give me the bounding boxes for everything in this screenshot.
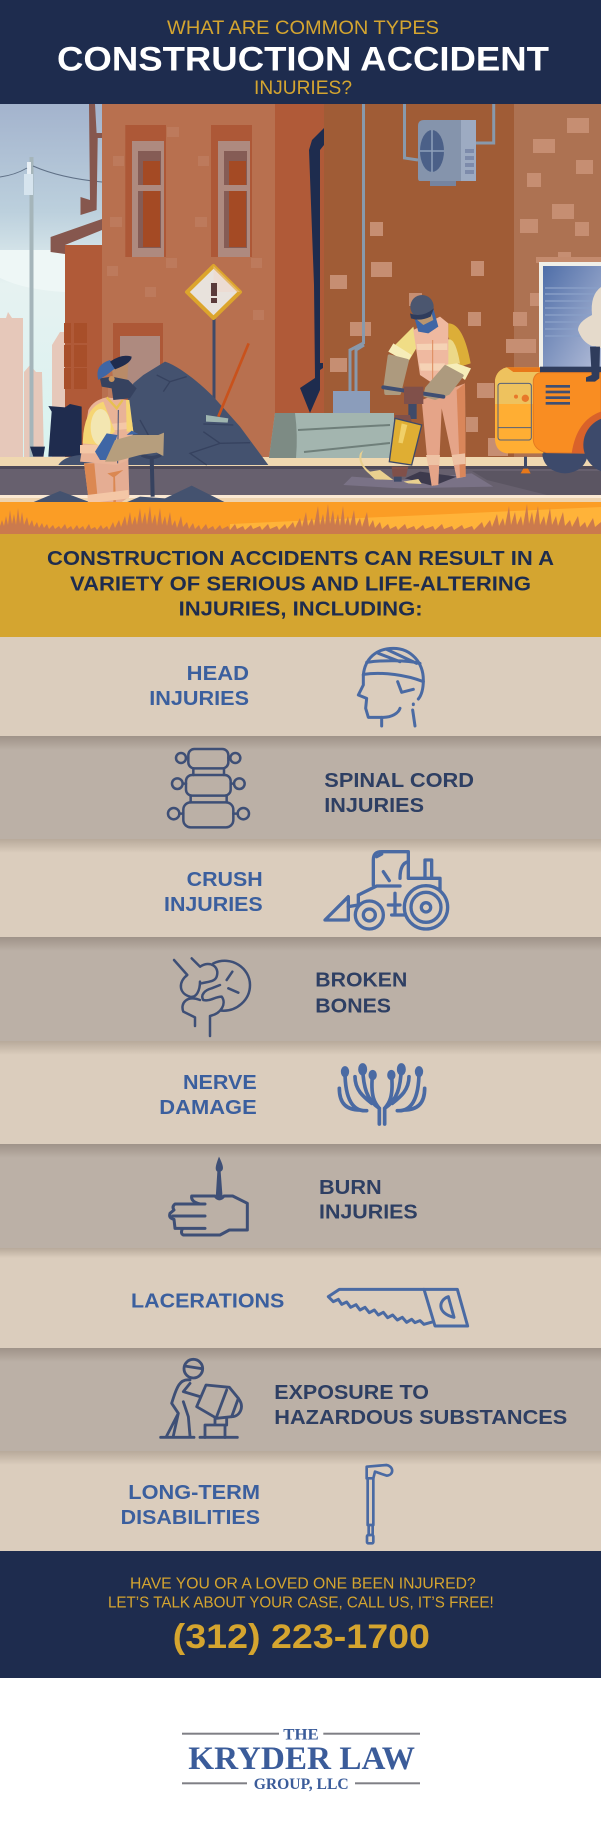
icon: vertebrae [168,749,249,827]
head [112,363,128,382]
shovel handle [152,457,153,497]
label: INJURIES [149,688,249,710]
icon: bandaged head [358,648,423,726]
label [149,663,249,710]
call to action text: LET’S TALK ABOUT YOUR CASE, CALL US, IT’S FREE! [108,1594,494,1611]
truck body [495,367,543,453]
icon: hand saw [328,1289,468,1326]
label: INJURIES [319,1202,418,1224]
head [415,308,438,333]
header banner [0,0,601,104]
label [319,1177,418,1224]
right worker, jackhammer and truck [343,295,601,488]
icon: broken bone [174,958,250,1036]
label: BURN [319,1177,382,1199]
label: INJURIES [324,795,424,817]
right brick building [324,104,601,458]
left brick building [51,104,324,458]
label: HEAD [187,663,249,685]
header subline: INJURIES? [254,77,352,99]
label [159,1072,257,1119]
rubble [359,450,422,484]
phone number: (312) 223-1700 [173,1618,430,1656]
icon: worker with cement mixer [161,1359,241,1437]
intro band [0,534,601,637]
sidewalk and road [0,457,601,502]
logo: The Kryder Law Group: KRYDER LAW [188,1741,415,1777]
label [274,1382,567,1429]
icon: burned hand [170,1157,247,1235]
call to action text: HAVE YOU OR A LOVED ONE BEEN INJURED? [130,1575,476,1592]
left worker and asphalt pile [25,343,268,506]
sky and skyline [0,104,110,464]
air conditioner [404,104,494,186]
label: LONG-TERM [128,1482,260,1504]
upper windows [125,125,252,257]
label: HAZARDOUS SUBSTANCES [274,1407,567,1429]
label: NERVE [183,1072,257,1094]
label: EXPOSURE TO [274,1382,429,1404]
main title: CONSTRUCTION ACCIDENT [57,40,549,78]
label [324,770,474,817]
broom [218,343,249,417]
row: head injuries [0,637,601,736]
arm [95,431,138,460]
label [315,970,407,1018]
utility pole [0,157,102,458]
trash bin [30,404,82,457]
label: BONES [315,996,391,1018]
label: BROKEN [315,970,407,992]
row: lacerations [0,1248,601,1348]
row: broken bones [0,937,601,1041]
legs [422,383,466,486]
road slab and hole [343,473,493,488]
pants [84,460,129,506]
lower window and door [64,323,163,458]
label [121,1482,260,1529]
truck wheel under body [542,433,588,473]
vest [80,397,133,465]
warning sign [187,266,240,444]
logo: The Kryder Law Group [182,1726,420,1793]
small asphalt piles [25,486,232,506]
icon: walking cane [367,1465,392,1543]
row: burn injuries [0,1144,601,1248]
label [164,869,263,916]
illustration: construction street scene [0,104,601,534]
icon: bulldozer [325,852,448,929]
row: spinal cord injuries [0,736,601,839]
row: long-term disabilities [0,1451,601,1551]
row: exposure to hazardous substances [0,1348,601,1451]
row: nerve damage [0,1041,601,1144]
intro text [47,547,554,621]
asphalt pile [58,362,268,465]
arms [385,356,407,393]
label: DISABILITIES [121,1507,260,1529]
call to action text [108,1575,494,1611]
icon: nerve endings [339,1065,425,1124]
label: DAMAGE [159,1097,257,1119]
intro text: INJURIES, INCLUDING: [179,598,423,621]
drain pipes [300,104,364,413]
concrete block [269,391,394,458]
logo: The Kryder Law Group: THE [283,1726,319,1743]
jackhammer [383,387,443,397]
vest [413,317,448,382]
yellow sleeves [388,327,417,362]
header kicker: WHAT ARE COMMON TYPES [167,17,439,39]
label: INJURIES [164,894,263,916]
call to action footer [0,1551,601,1678]
row: crush injuries [0,839,601,937]
grass strip [0,502,601,534]
window with truck cab [536,257,601,368]
label: CRUSH [187,869,263,891]
logo: The Kryder Law Group: GROUP, LLC [254,1776,349,1793]
intro text: VARIETY OF SERIOUS AND LIFE-ALTERING [70,573,531,596]
label: LACERATIONS [131,1291,284,1313]
intro text: CONSTRUCTION ACCIDENTS CAN RESULT IN A [47,547,554,570]
label: SPINAL CORD [324,770,474,792]
